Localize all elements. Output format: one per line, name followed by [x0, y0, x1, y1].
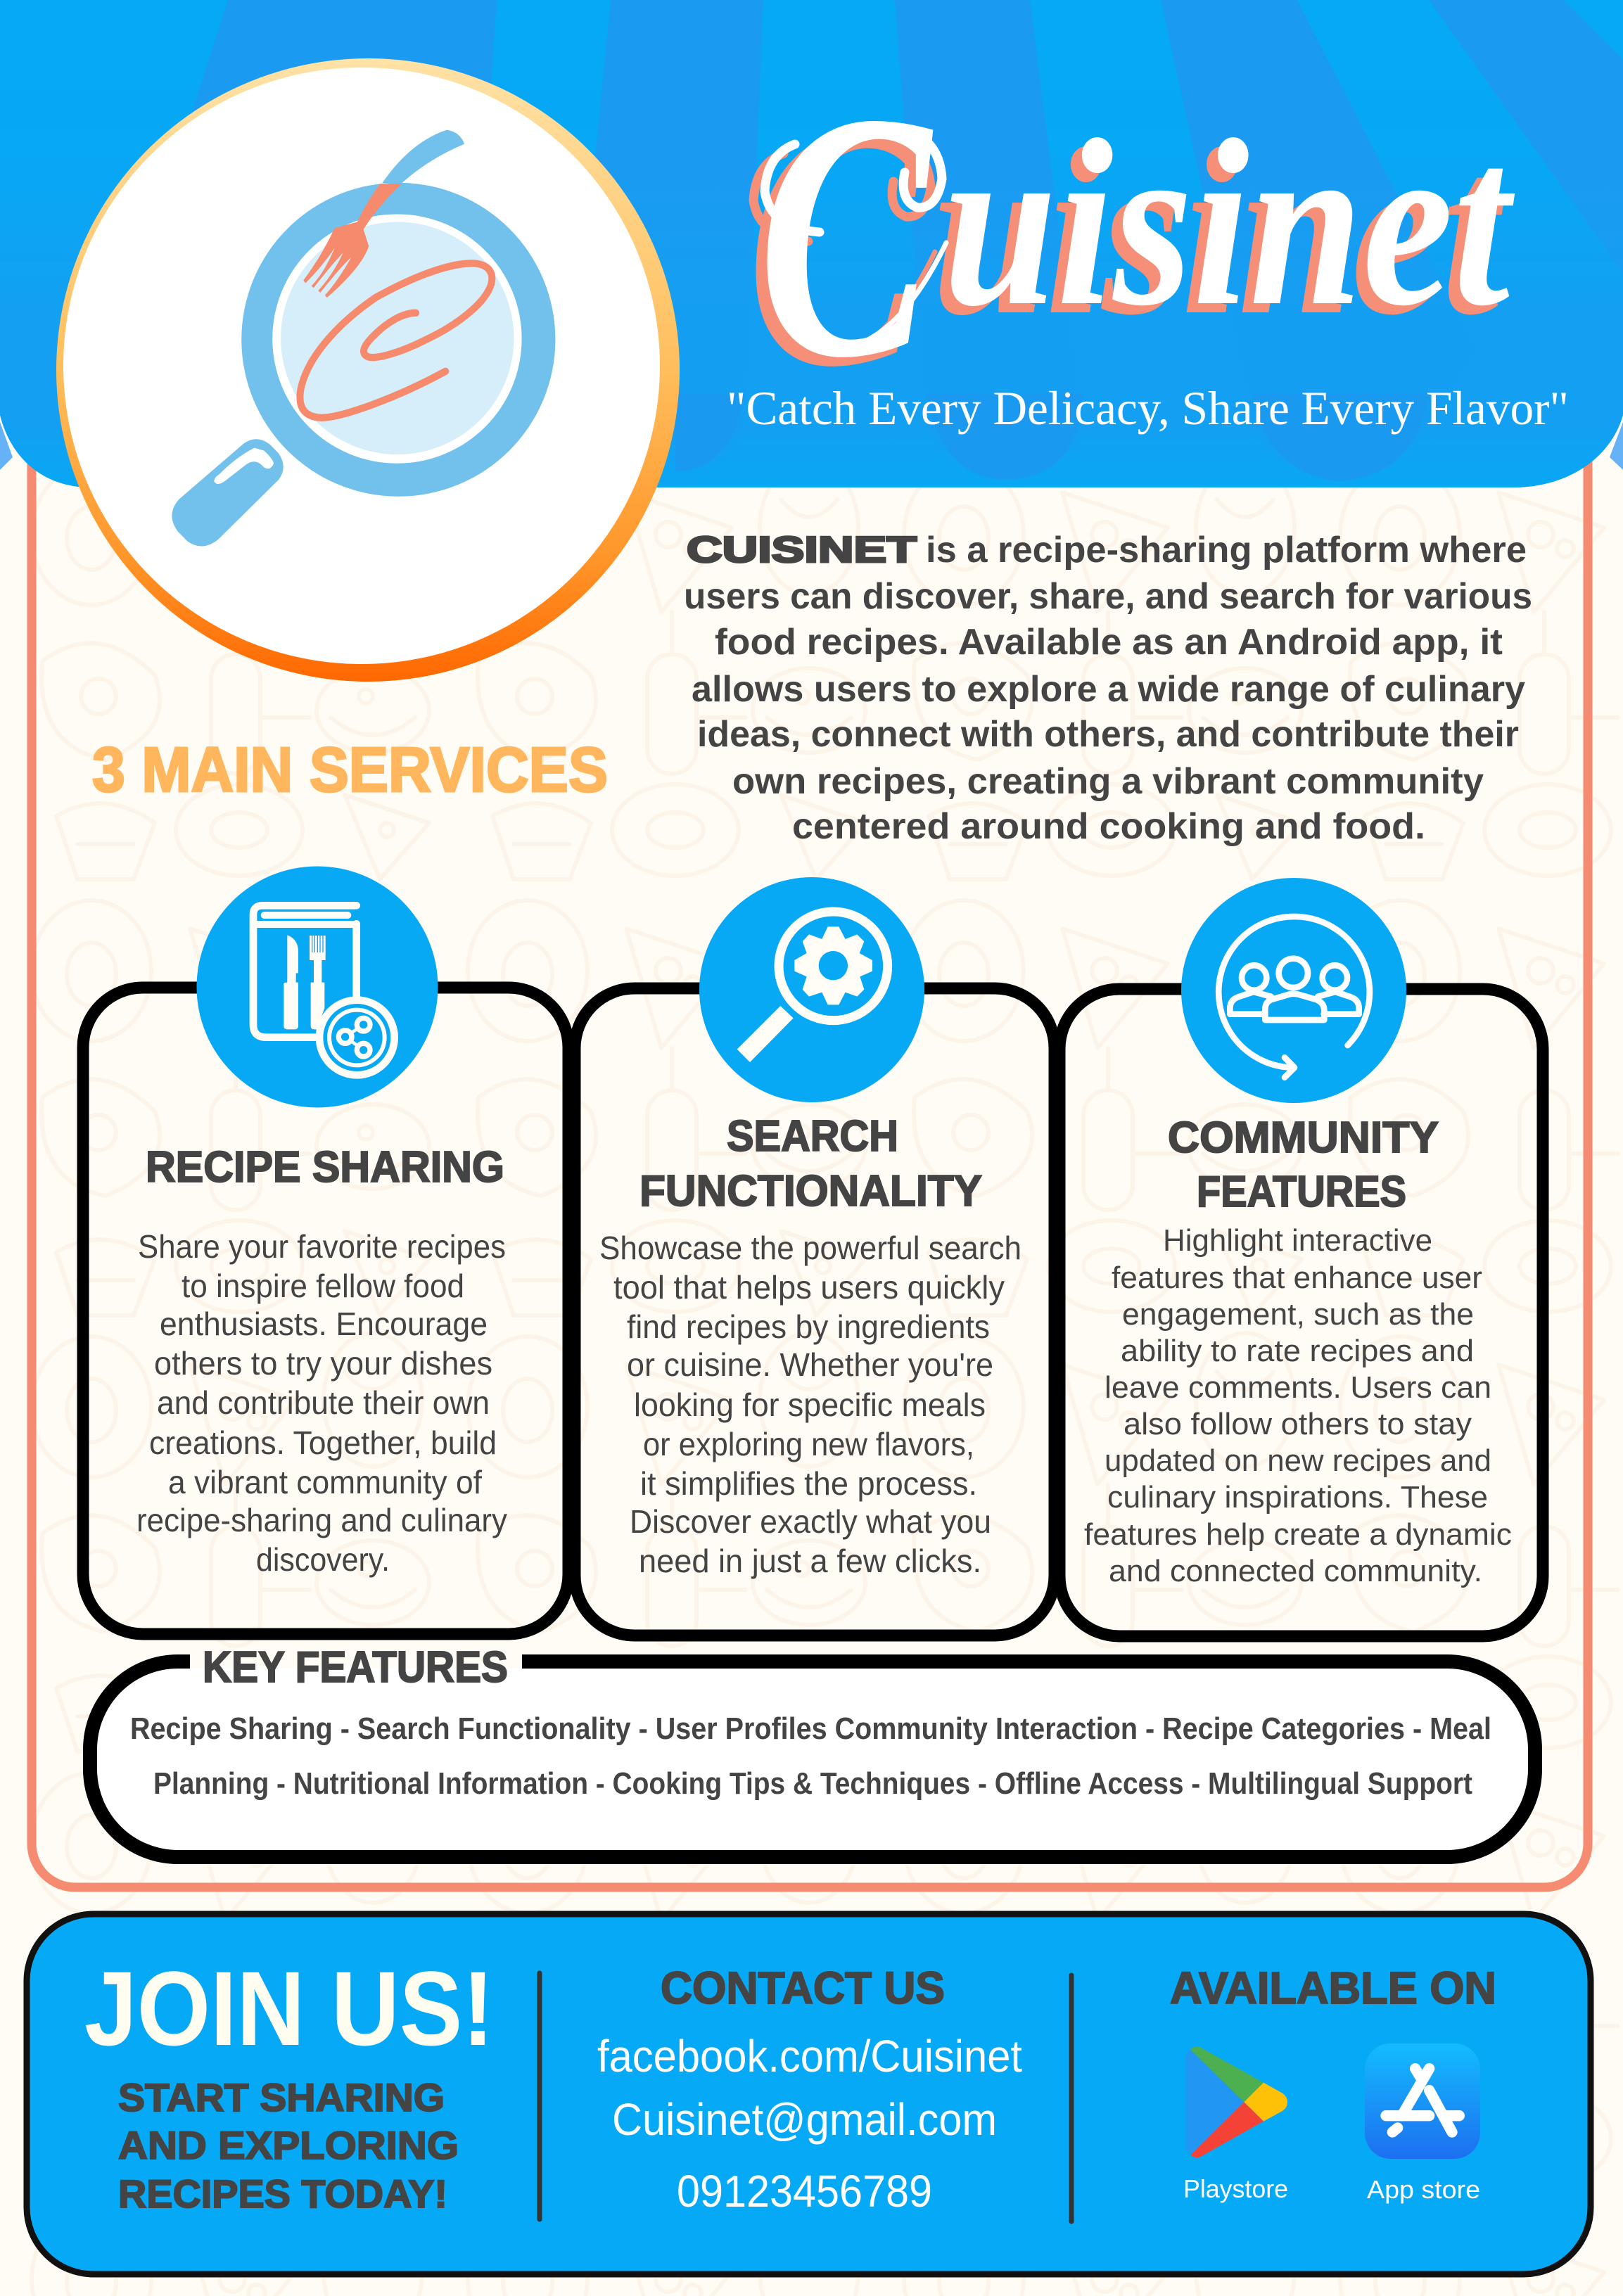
card body text	[136, 1228, 507, 1578]
join us subtext: AND EXPLORING	[118, 2123, 459, 2167]
section heading: 3 main services: 3 MAIN SERVICES	[92, 735, 608, 805]
available on: AVAILABLE ON	[1170, 1963, 1496, 2013]
card body text: and contribute their own	[157, 1384, 490, 1421]
card body text: and connected community.	[1109, 1554, 1482, 1588]
contact us: 09123456789	[677, 2166, 932, 2217]
card body text: to inspire fellow food	[182, 1268, 464, 1304]
brand title: Cuisinet: uisinet	[932, 99, 1506, 364]
card heading: FUNCTIONALITY	[639, 1167, 982, 1216]
card body text: leave comments. Users can	[1105, 1370, 1491, 1405]
contact us: CONTACT US	[661, 1963, 945, 2013]
contact us: facebook.com/Cuisinet	[597, 2031, 1022, 2081]
icon: app store	[1365, 2043, 1480, 2159]
card body text: features help create a dynamic	[1084, 1517, 1512, 1552]
key features list: Recipe Sharing - Search Functionality - User Profiles Community Interaction - Recipe Categories - Meal	[130, 1711, 1491, 1746]
card heading	[1168, 1114, 1439, 1216]
intro paragraph: food recipes. Available as an Android app, it	[715, 622, 1503, 663]
icon: magnifier plate logo	[172, 130, 555, 546]
join us headline: JOIN US!	[84, 1949, 494, 2067]
icon: community group	[1181, 878, 1406, 1103]
panel: community features	[1059, 878, 1543, 1636]
card heading: SEARCH	[727, 1112, 898, 1161]
card body text: culinary inspirations. These	[1107, 1480, 1488, 1514]
card body text: looking for specific meals	[634, 1386, 986, 1423]
available on	[1170, 1963, 1496, 2204]
panel: key features	[90, 1643, 1535, 1857]
intro paragraph: CUISINET	[687, 530, 917, 570]
card body text: tool that helps users quickly	[613, 1269, 1005, 1306]
card body text: updated on new recipes and	[1105, 1443, 1491, 1478]
card body text: it simplifies the process.	[640, 1465, 977, 1502]
icon: recipe book with share	[197, 867, 438, 1107]
card body text: or exploring new flavors,	[643, 1426, 974, 1462]
key features list: Planning - Nutritional Information - Cooking Tips & Techniques - Offline Access - Multilingual Support	[153, 1766, 1472, 1801]
card body text: features that enhance user	[1112, 1261, 1482, 1295]
card body text: Highlight interactive	[1163, 1223, 1432, 1258]
card heading: RECIPE SHARING	[146, 1143, 504, 1192]
card body text: discovery.	[256, 1541, 390, 1578]
panel: search functionality	[575, 877, 1055, 1635]
join us subtext: START SHARING	[118, 2075, 445, 2119]
join us subtext: RECIPES TODAY!	[118, 2171, 447, 2216]
brand title: Cuisinet: C	[747, 50, 925, 440]
card body text: find recipes by ingredients	[627, 1308, 990, 1345]
panel: recipe sharing	[83, 867, 568, 1634]
key features list	[130, 1711, 1491, 1801]
card body text: engagement, such as the	[1122, 1297, 1474, 1332]
card body text: also follow others to stay	[1124, 1407, 1472, 1441]
key features heading: KEY FEATURES	[203, 1643, 508, 1692]
card body text: creations. Together, build	[149, 1424, 497, 1461]
intro paragraph: own recipes, creating a vibrant community	[732, 761, 1484, 802]
intro paragraph: users can discover, share, and search for various	[684, 576, 1532, 617]
logo medallion	[56, 58, 680, 682]
contact us: Cuisinet@gmail.com	[612, 2094, 997, 2145]
brand title: Cuisinet	[747, 41, 1517, 440]
intro paragraph: allows users to explore a wide range of culinary	[692, 669, 1525, 710]
card body text	[599, 1230, 1021, 1579]
card body text: need in just a few clicks.	[639, 1543, 981, 1579]
available on: App store	[1367, 2175, 1480, 2204]
brand title: Cuisinet: C	[758, 41, 936, 431]
card body text: Showcase the powerful search	[599, 1230, 1021, 1266]
join us subtext	[118, 2075, 459, 2216]
card body text: enthusiasts. Encourage	[160, 1306, 488, 1342]
card body text: others to try your dishes	[154, 1345, 492, 1382]
intro paragraph	[684, 530, 1532, 847]
icon: play store	[1185, 2047, 1287, 2157]
brand title: Cuisinet: uisinet	[943, 90, 1517, 355]
outer coral frame	[32, 394, 1588, 1887]
card body text: or cuisine. Whether you're	[627, 1346, 993, 1383]
card body text: recipe-sharing and culinary	[136, 1502, 507, 1538]
card body text: a vibrant community of	[168, 1464, 482, 1500]
contact us	[597, 1963, 1022, 2217]
card body text: Share your favorite recipes	[138, 1228, 506, 1265]
card heading: FEATURES	[1197, 1168, 1406, 1216]
intro paragraph: ideas, connect with others, and contribute their	[697, 714, 1519, 755]
card body text: Discover exactly what you	[630, 1503, 991, 1540]
header banner	[0, 0, 1623, 492]
intro paragraph: is a recipe-sharing platform where	[926, 530, 1527, 570]
icon: magnifier with gear	[699, 877, 924, 1102]
card heading	[639, 1112, 982, 1216]
tagline: "Catch Every Delicacy, Share Every Flavor"	[727, 381, 1569, 435]
card heading: COMMUNITY	[1168, 1114, 1439, 1162]
card body text: ability to rate recipes and	[1121, 1334, 1474, 1368]
card body text	[1084, 1223, 1512, 1588]
intro paragraph: centered around cooking and food.	[792, 806, 1425, 847]
panel: call to action footer	[27, 1914, 1591, 2274]
store labels: Playstore	[1183, 2174, 1288, 2203]
